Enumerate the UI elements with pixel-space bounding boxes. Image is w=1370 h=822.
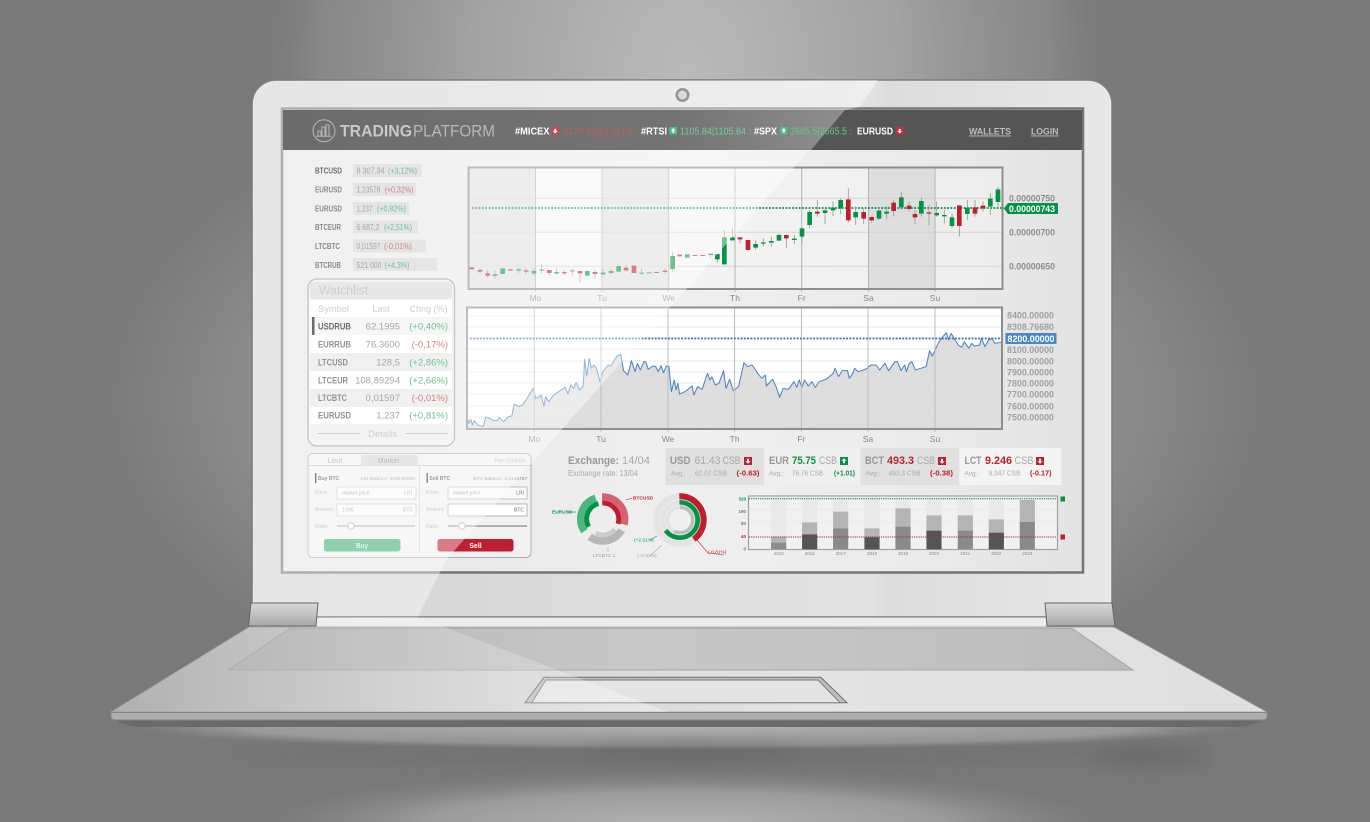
row BTCRUB: BTCRUB (315, 261, 341, 270)
row BTCUSD: (+3,12%) (388, 166, 417, 176)
sell column: BTC Balance: 2.3149767 (473, 476, 527, 482)
exchange card BCT: CSB (917, 455, 935, 467)
column headers: Last (372, 304, 390, 314)
floor glow (130, 700, 1250, 750)
navigation links (969, 126, 1058, 136)
selected row marker (312, 317, 314, 335)
sell button: Sell (469, 543, 482, 550)
details link (318, 429, 448, 440)
chart frame (468, 168, 1002, 289)
exchange card LCT: 9.347 CSB (988, 468, 1020, 478)
value axis: 7900.00000 (1007, 368, 1054, 378)
watchlist rows (318, 322, 448, 422)
current value tag: 8200.00000 (1008, 334, 1054, 344)
watchlist rows: 108,89294 (355, 376, 400, 386)
exchange card EUR: Avg.: (769, 470, 784, 478)
details link: Details (368, 429, 397, 440)
column headers: Chng (%) (409, 304, 448, 314)
sell column: Ratio: (426, 524, 439, 530)
axis labels: 40 (741, 534, 746, 539)
front lip (111, 712, 1267, 727)
exchange card LCT (960, 448, 1062, 485)
exchange card USD: (-0.63) (736, 468, 760, 478)
year labels: 2019 (898, 551, 909, 556)
line chart (467, 308, 1056, 444)
price axis (1009, 194, 1055, 272)
sell column: Amount: (426, 507, 445, 513)
watchlist rows: EURRUB (318, 340, 351, 350)
navigation links: WALLETS (969, 126, 1011, 136)
axis labels: 160 (738, 509, 746, 514)
market ticker: 2665.5|2665.5 : (790, 126, 852, 138)
exchange card EUR: (+1.01) (834, 468, 855, 478)
donut chart two (634, 496, 727, 559)
exchange card LCT: Avg.: (964, 470, 979, 478)
line chart frame (467, 308, 1002, 429)
market ticker (515, 126, 904, 138)
keyboard area (228, 628, 1133, 670)
market ticker: 2176.04|2176.04 : (563, 126, 638, 138)
exchange card BCT: 493.3 (887, 455, 914, 467)
exchange heading: 14/04 (622, 455, 650, 467)
row BTCRUB: (+4,3%) (384, 261, 410, 270)
watchlist rows: 76.3600 (366, 340, 400, 350)
logo text: TRADING (340, 122, 412, 140)
watchlist rows: (+2,66%) (409, 376, 448, 386)
value axis: 8000.00000 (1007, 356, 1054, 366)
exchange card LCT: LCT (964, 455, 982, 467)
column headers: Symbol (318, 304, 349, 314)
donut labels: LTCBTC 1 (593, 553, 616, 559)
exchange card EUR (764, 448, 860, 485)
exchange card EUR: 76.76 CSB (792, 468, 823, 478)
day labels: Mo (528, 434, 540, 444)
tabs: Fee: 0.0050% (495, 458, 527, 464)
watchlist rows: 0,01597 (366, 393, 400, 404)
exchange heading: Exchange rate: 13/04 (568, 469, 638, 478)
donut labels (552, 496, 654, 559)
exchange card USD: USD (670, 455, 691, 467)
year labels: 2021 (960, 551, 971, 556)
donut labels: EURUSD (552, 510, 573, 516)
watchlist rows: (-0,01%) (412, 393, 448, 404)
axis labels: 320 (738, 496, 746, 502)
row LTCBTC: 0,01597 (356, 242, 381, 251)
day labels: Sa (863, 434, 873, 444)
bar chart limits (749, 496, 1065, 540)
target price dotted line (472, 207, 1004, 209)
axis labels (738, 496, 746, 552)
watchlist panel (308, 279, 454, 446)
year labels: 2015 (774, 551, 784, 556)
buy column: Ratio: (315, 524, 328, 530)
price axis: 0.00000650 (1009, 262, 1055, 272)
exchange card LCT: CSB (1014, 455, 1034, 467)
sell column: BTC (514, 508, 524, 514)
tabs (308, 455, 531, 466)
row BTCEUR: (+2,51%) (384, 223, 412, 232)
deck glare (111, 617, 670, 713)
row BTCUSD: 8 307,34 (356, 166, 385, 176)
watchlist rows: 62.1995 (366, 322, 400, 332)
year labels: 2022 (991, 551, 1002, 556)
webcam (676, 88, 690, 102)
exchange card USD: Avg.: (671, 470, 686, 478)
year labels: 2017 (836, 551, 846, 556)
exchange card BCT: 493.3 CSB (888, 468, 920, 478)
top glow (255, 0, 1115, 620)
watchlist rows: 128,5 (376, 358, 400, 368)
tabs: Market (378, 458, 399, 465)
exchange card USD: 62.07 CSB (695, 468, 727, 478)
donut labels two: (+2.51%) (634, 538, 654, 544)
donut chart one (552, 489, 654, 559)
touchpad (525, 677, 847, 703)
watchlist rows: USDRUB (318, 322, 351, 332)
watchlist rows: EURUSD (318, 410, 351, 422)
reference dotted line (470, 338, 1002, 340)
exchange card BCT: Avg.: (866, 470, 880, 478)
exchange card EUR: EUR (769, 455, 789, 467)
market ticker: #RTSI (641, 126, 667, 138)
market ticker: #SPX (754, 126, 777, 138)
watchlist rows: LTCEUR (318, 376, 348, 386)
market ticker: EURUSD (857, 126, 893, 138)
sell column: Price: (426, 490, 439, 496)
watchlist rows: 1,237 (376, 410, 400, 422)
exchange heading (568, 455, 650, 478)
bottom glow (255, 765, 1115, 822)
exchange card BCT: (-0.38) (930, 468, 954, 478)
day labels: Su (930, 434, 940, 444)
watchlist title: Watchlist (319, 284, 369, 298)
right hinge (1045, 603, 1115, 626)
sell column: market price (453, 490, 481, 496)
exchange card LCT: 9.246 (985, 455, 1012, 467)
axis labels: 0 (743, 546, 746, 552)
day labels: Fr (797, 434, 806, 444)
bars (771, 500, 1035, 549)
hinge strip (252, 617, 1112, 628)
row BTCUSD (315, 164, 422, 177)
exchange card BCT: BCT (865, 455, 884, 467)
row EURUSD (315, 183, 416, 196)
navigation links: LOGIN (1031, 126, 1058, 136)
buy column: BTC (403, 508, 413, 514)
row BTCRUB: 521 000 (356, 261, 382, 270)
donut labels: BTCUSD (633, 496, 654, 502)
exchange heading: Exchange: (568, 455, 619, 467)
day labels: Th (730, 293, 740, 303)
bar chart (738, 496, 1065, 556)
sell column: Sell BTC (430, 476, 450, 482)
donut labels two (634, 536, 727, 559)
row EURUSD: (+0,32%) (384, 186, 414, 194)
order panel (308, 454, 531, 558)
year labels: 2023 (1022, 551, 1033, 556)
lid glare (253, 80, 878, 617)
market ticker: #MICEX (515, 126, 550, 138)
ticker list (315, 164, 437, 271)
watchlist rows: (+2,86%) (409, 358, 448, 368)
day labels: Fr (798, 293, 806, 303)
donut labels two: (+0.82%) (637, 553, 657, 559)
watchlist rows: LTCUSD (318, 358, 348, 368)
row EURUSD 2: (+0,82%) (377, 204, 406, 214)
year labels: 2018 (867, 551, 878, 556)
value axis: 8308.76680 (1007, 322, 1054, 332)
day labels: Tu (597, 293, 607, 303)
year labels: 2020 (929, 551, 940, 556)
row LTCBTC: (-0,01%) (384, 242, 412, 251)
row LTCBTC: LTCBTC (315, 242, 340, 251)
watchlist rows: LTCBTC (318, 393, 347, 404)
floor shadow (220, 745, 1210, 765)
value axis: 8100.00000 (1007, 345, 1054, 355)
exchange card LCT: (-0.17) (1030, 468, 1052, 478)
header bar (283, 110, 1082, 150)
candles part two (680, 187, 998, 264)
candles part one (472, 252, 673, 283)
day labels: Tu (596, 434, 606, 444)
row EURUSD 2: 1,237 (356, 204, 373, 214)
buy button: Buy (356, 543, 369, 550)
row EURUSD: EURUSD (315, 186, 342, 194)
buy column: market price (342, 490, 370, 496)
row EURUSD: 1,23578 (356, 186, 381, 194)
day labels (530, 293, 940, 303)
day labels: We (662, 434, 675, 444)
buy column: LRI (404, 490, 412, 496)
left hinge (248, 603, 318, 626)
row EURUSD 2 (315, 202, 409, 215)
row BTCEUR: BTCEUR (315, 223, 341, 232)
buy column: 1.5% (342, 508, 354, 514)
column headers (318, 304, 448, 314)
year labels: 2016 (805, 551, 815, 556)
year labels (774, 551, 1033, 556)
screen (282, 108, 1083, 572)
watchlist rows: (+0,81%) (409, 410, 448, 422)
logo text: PLATFORM (413, 122, 495, 140)
logo text (340, 122, 495, 140)
value axis: 7600.00000 (1007, 402, 1054, 412)
day labels: Th (730, 434, 740, 444)
exchange card EUR: 75.75 (792, 455, 816, 467)
exchange card BCT (860, 448, 959, 485)
day labels (528, 434, 940, 444)
buy column: Amount: (315, 507, 334, 513)
market ticker: 1105.84|1105.84 : (680, 126, 751, 138)
sell column: LRI (516, 490, 524, 496)
laptop lid (252, 80, 1112, 617)
watchlist rows: (+0,40%) (409, 322, 448, 332)
exchange card USD: 61.43 (694, 455, 720, 467)
row LTCBTC (315, 240, 426, 252)
axis labels: 80 (741, 521, 746, 526)
buy column: Price: (315, 490, 328, 496)
row BTCEUR: 6 687,2 (356, 223, 380, 232)
exchange card USD (666, 448, 764, 485)
tabs: Limit (328, 458, 342, 465)
buy column: LRI Balance: 9000.00000 (361, 476, 415, 482)
donut labels two: (-0.81%) (708, 550, 727, 556)
value axis (1007, 310, 1054, 422)
candlestick chart (468, 168, 1058, 303)
value axis: 8400.00000 (1007, 310, 1054, 320)
laptop base (111, 603, 1267, 727)
row EURUSD 2: EURUSD (315, 204, 342, 214)
exchange card USD: CSB (722, 455, 740, 467)
value axis: 7700.00000 (1007, 390, 1054, 400)
day labels: Su (930, 293, 940, 303)
row BTCUSD: BTCUSD (315, 166, 342, 176)
price axis: 0.00000700 (1009, 228, 1055, 238)
day labels: Mo (530, 293, 542, 303)
exchange card EUR: CSB (819, 455, 837, 467)
deck (111, 627, 1267, 712)
day labels: Sa (863, 293, 874, 303)
current price tag: 0.00000743 (1009, 204, 1055, 214)
day labels: We (662, 293, 675, 303)
logo icon (313, 120, 335, 142)
buy column (315, 473, 416, 552)
price curve (467, 333, 1002, 429)
row BTCEUR (315, 220, 418, 234)
watchlist rows: (-0,17%) (412, 340, 448, 350)
value axis: 7500.00000 (1007, 412, 1054, 422)
sell column (426, 473, 527, 552)
value axis: 7800.00000 (1007, 378, 1054, 388)
buy column: Buy BTC (318, 476, 340, 482)
price axis: 0.00000750 (1009, 194, 1055, 204)
row BTCRUB (315, 258, 437, 271)
